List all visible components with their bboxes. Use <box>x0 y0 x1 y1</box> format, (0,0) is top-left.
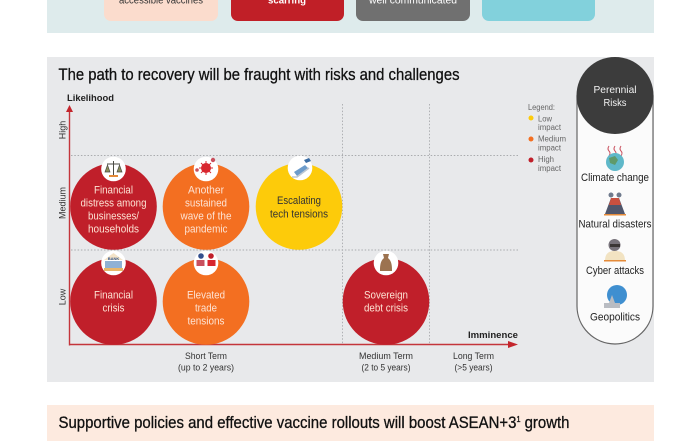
risk: natural disasters: Natural disasters <box>578 218 652 230</box>
axis: y likelihood: Likelihood <box>67 93 114 103</box>
chart: risk matrix <box>58 93 518 372</box>
legend: impact <box>538 123 562 132</box>
panel: perennial risks <box>576 57 654 344</box>
legend: Low <box>538 114 552 124</box>
bubble: trade tensions: trade <box>195 302 217 314</box>
heading: supportive policies: growth <box>520 414 570 432</box>
card: accessible vaccines <box>104 0 218 21</box>
y axis labels <box>58 121 68 305</box>
bubble: financial distress <box>70 157 157 250</box>
icon: scales <box>101 157 126 181</box>
x axis labels: Short Term <box>185 351 227 361</box>
legend: impact <box>538 144 562 152</box>
icon: virus <box>194 157 218 181</box>
axis: x imminence <box>69 330 518 348</box>
risk: natural disasters <box>578 192 652 230</box>
panel: top recommendations <box>47 0 654 33</box>
card: teal <box>482 0 595 21</box>
perennial risks heading circle <box>576 57 654 134</box>
bubble: financial distress: Financial <box>94 184 133 196</box>
risk: cyber attacks: Cyber attacks <box>586 265 644 277</box>
risk: climate change: Climate change <box>581 172 649 184</box>
bubble: sovereign debt <box>343 251 429 345</box>
grid lines <box>71 104 518 345</box>
bubble: tech tensions: Escalating <box>277 195 321 207</box>
bubble: sustained wave: Another <box>188 184 224 196</box>
axis: y likelihood <box>66 93 114 346</box>
x axis labels: (2 to 5 years) <box>362 362 410 372</box>
legend <box>528 103 566 173</box>
bubble: financial crisis: crisis <box>102 302 125 314</box>
risk: geopolitics: Geopolitics <box>590 312 640 324</box>
bubble: financial distress: households <box>88 224 139 236</box>
bubble: sustained wave: wave of the <box>180 210 232 222</box>
x axis labels <box>178 351 494 372</box>
bubble: tech tensions <box>256 156 342 250</box>
icon: debt bag <box>374 251 398 275</box>
legend: impact <box>538 164 562 173</box>
card: scarring <box>231 0 344 21</box>
bubble: financial distress: distress among <box>80 198 146 210</box>
bubble: financial distress: businesses/ <box>88 210 140 222</box>
bubble: sustained wave: sustained <box>185 198 227 210</box>
icon: trade flags <box>194 251 218 275</box>
panel: risks and challenges <box>47 57 654 382</box>
y axis labels: Medium <box>58 187 68 219</box>
heading: path to recovery: The path to recovery will be fraught with risks and challenges <box>58 66 460 84</box>
icon: bank: BANK <box>108 256 119 261</box>
y axis labels: High <box>58 121 68 139</box>
bubble: trade tensions: Elevated <box>187 290 225 302</box>
bubble: sustained wave: pandemic <box>184 224 228 236</box>
y axis labels: Low <box>58 288 68 305</box>
legend: Medium <box>538 134 566 144</box>
heading: supportive policies: 1 <box>516 415 521 424</box>
x axis labels: Long Term <box>453 351 494 361</box>
x axis labels: Medium Term <box>359 351 413 361</box>
panel: supportive policies <box>47 405 654 441</box>
bubble: financial crisis: Financial <box>94 290 133 302</box>
card: well communicated <box>356 0 470 21</box>
bubble: trade tensions <box>163 251 249 345</box>
axis: x imminence: Imminence <box>468 330 518 340</box>
bubble: trade tensions: tensions <box>188 316 225 328</box>
heading: supportive policies: Supportive policies and effective vaccine rollouts will boost ASEAN+3 <box>58 414 564 432</box>
risk: climate change <box>581 146 649 184</box>
bubble: tech tensions: tech tensions <box>270 208 328 220</box>
icon: tech <box>288 156 312 180</box>
x axis labels: (up to 2 years) <box>178 362 234 372</box>
bubble: sovereign debt: Sovereign <box>364 290 408 302</box>
bubble: financial crisis <box>70 251 157 345</box>
legend: High <box>538 155 554 164</box>
bubble: sustained wave <box>163 157 249 250</box>
risk: cyber attacks <box>586 239 644 277</box>
perennial risks heading circle: Perennial <box>594 84 636 96</box>
risk: geopolitics <box>590 285 640 324</box>
bubble: sovereign debt: debt crisis <box>364 302 408 314</box>
x axis labels: (>5 years) <box>454 362 493 372</box>
perennial risks heading circle: Risks <box>604 97 626 109</box>
legend: Legend: <box>528 103 555 112</box>
